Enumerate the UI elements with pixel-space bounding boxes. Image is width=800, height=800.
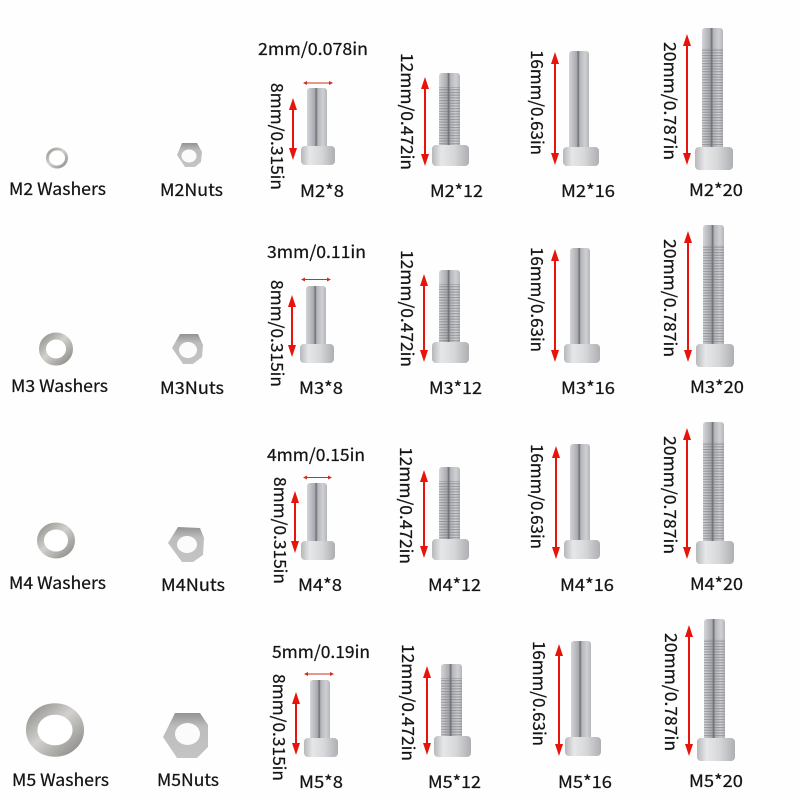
label: M2*8: M2*8 (300, 177, 344, 202)
vertical label: 16mm: 16mm/0.63in (528, 641, 553, 746)
label: M4 diameter: 4mm/0.15in (267, 441, 365, 466)
panel: M4 row (9, 422, 743, 596)
bolt: M3*16 (564, 248, 600, 363)
arrow: M2*16 length (551, 52, 559, 165)
washer: M2 (48, 149, 66, 167)
vertical label: 16mm: 16mm/0.63in (526, 247, 551, 352)
label: M3 Washers: M3 Washers (11, 372, 108, 397)
bolt: M2*20 (695, 28, 733, 170)
arrow: M3*20 length (684, 231, 692, 362)
label: M5 Washers: M5 Washers (12, 766, 109, 791)
bolt: M3*12 (432, 270, 469, 363)
label: M3*12: M3*12 (429, 374, 482, 399)
label: M4*20: M4*20 (690, 570, 743, 595)
washer: M4 (40, 526, 72, 555)
panel: M5 row (12, 619, 743, 793)
bolt: M5*20 (697, 619, 735, 761)
panel: M3 row (11, 225, 744, 399)
label: M5*16: M5*16 (558, 768, 612, 793)
label: M3*8: M3*8 (299, 374, 343, 399)
arrow: M5 diameter (304, 672, 334, 676)
washer: M5 (32, 709, 78, 751)
bolt: M2*8 (301, 88, 335, 165)
label: M2*16: M2*16 (561, 177, 615, 202)
vertical label: 8mm: 8mm/0.315in (268, 674, 293, 781)
vertical label: 12mm: 12mm/0.472in (397, 644, 422, 761)
nut: M5 (163, 713, 208, 758)
label: M4*12: M4*12 (428, 571, 481, 596)
vertical label: 20mm: 20mm/0.787in (659, 436, 684, 554)
arrow: M5*12 length (423, 666, 431, 755)
arrow: M3*16 length (551, 249, 559, 362)
bolt: M3*20 (696, 225, 734, 367)
arrow: M4*16 length (552, 446, 560, 559)
label: M5*20: M5*20 (689, 767, 743, 792)
nut: M3 (172, 334, 203, 364)
arrow: M4*8 length (291, 491, 299, 553)
vertical label: 20mm: 20mm/0.787in (659, 42, 684, 160)
vertical label: 16mm: 16mm/0.63in (526, 444, 551, 549)
vertical label: 16mm: 16mm/0.63in (526, 50, 551, 155)
vertical label: 12mm: 12mm/0.472in (396, 53, 421, 170)
label: M2*12: M2*12 (430, 177, 483, 202)
bolt: M5*16 (565, 641, 601, 756)
label: M3*16: M3*16 (561, 374, 615, 399)
arrow: M3 diameter (301, 278, 331, 282)
bolt: M3*8 (300, 286, 334, 363)
arrow: M4*20 length (683, 428, 691, 559)
label: M4*8: M4*8 (298, 571, 342, 596)
label: M4 Washers: M4 Washers (9, 569, 106, 594)
vertical label: 12mm: 12mm/0.472in (396, 250, 421, 367)
vertical label: 8mm: 8mm/0.315in (266, 83, 291, 190)
bolt: M4*12 (432, 467, 469, 560)
bolt: M2*12 (432, 73, 469, 166)
label: M2*20: M2*20 (689, 176, 743, 201)
arrow: M4*12 length (420, 470, 428, 558)
label: M5*8: M5*8 (299, 768, 343, 793)
label: M2 Washers: M2 Washers (9, 175, 106, 200)
arrow: M5*20 length (685, 625, 693, 756)
arrow: M5*8 length (292, 692, 300, 755)
arrow: M2 diameter (303, 81, 333, 85)
label: M3Nuts: M3Nuts (160, 374, 224, 399)
label: M5Nuts: M5Nuts (157, 766, 219, 791)
arrow: M3*12 length (420, 274, 428, 362)
label: M5 diameter: 5mm/0.19in (272, 638, 370, 663)
label: M2Nuts: M2Nuts (160, 176, 223, 201)
washer: M3 (42, 336, 70, 362)
bolt: M4*8 (301, 483, 335, 560)
vertical label: 8mm: 8mm/0.315in (269, 477, 294, 584)
vertical label: 12mm: 12mm/0.472in (395, 447, 420, 564)
vertical label: 20mm: 20mm/0.787in (660, 633, 685, 751)
arrow: M2*8 length (289, 98, 297, 160)
bolt: M4*20 (696, 422, 734, 564)
panel: M2 row (9, 28, 743, 202)
nut: M4 (168, 527, 204, 562)
bolt: M5*8 (304, 680, 338, 757)
arrow: M4 diameter (303, 476, 332, 480)
arrow: M5*16 length (555, 644, 563, 756)
bolt: M2*16 (563, 51, 599, 166)
label: M5*12: M5*12 (428, 768, 481, 793)
nut: M2 (177, 143, 202, 167)
bolt: M4*16 (564, 444, 600, 559)
bolt: M5*12 (434, 664, 471, 757)
label: M3*20: M3*20 (690, 373, 744, 398)
label: M4Nuts: M4Nuts (161, 571, 225, 596)
label: M3 diameter: 3mm/0.11in (267, 238, 366, 263)
label: M2 diameter: 2mm/0.078in (258, 35, 368, 60)
vertical label: 8mm: 8mm/0.315in (266, 280, 291, 387)
vertical label: 20mm: 20mm/0.787in (659, 239, 684, 357)
arrow: M3*8 length (288, 295, 296, 357)
label: M4*16: M4*16 (560, 571, 614, 596)
arrow: M2*20 length (683, 34, 691, 165)
arrow: M2*12 length (421, 77, 429, 166)
